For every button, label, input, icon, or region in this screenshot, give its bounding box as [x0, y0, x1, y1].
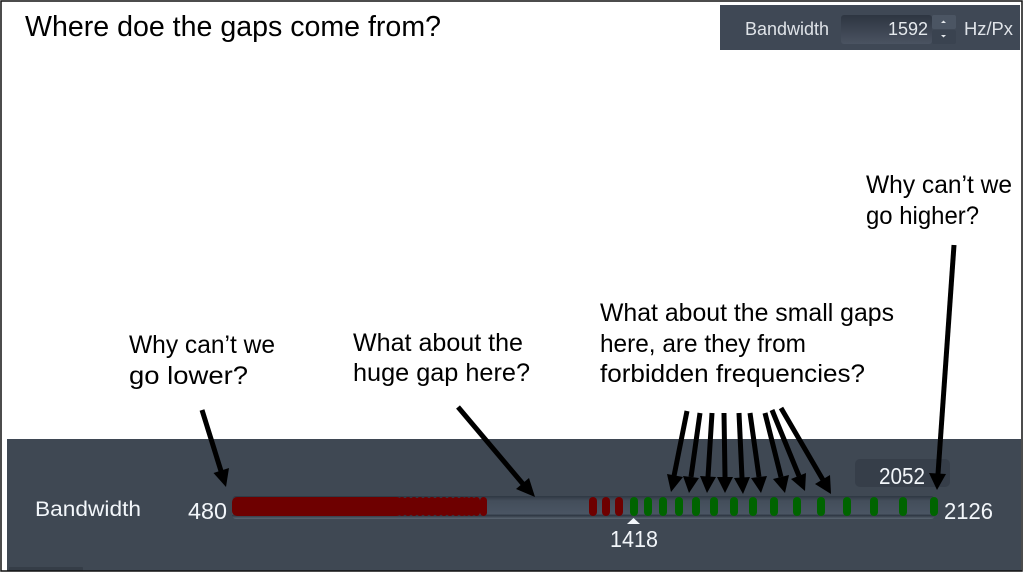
question: go higher: Why can’t we — [866, 171, 1012, 199]
question: go lower: go lower? — [129, 362, 248, 390]
spinner buttons — [932, 15, 956, 44]
question: huge gap: huge gap here? — [353, 359, 530, 387]
value field — [841, 15, 932, 44]
question: go lower — [129, 331, 275, 390]
top bandwidth control — [720, 5, 1020, 50]
question: huge gap — [353, 329, 530, 387]
maximum value: 2126 — [944, 498, 993, 524]
red ticks — [589, 497, 623, 516]
lower-left tab edge — [9, 567, 83, 571]
arrows — [202, 245, 954, 497]
question: small gaps: here, are they from — [600, 330, 806, 358]
question: go higher: go higher? — [866, 202, 979, 230]
red forbidden band — [232, 497, 487, 516]
question: huge gap: What about the — [353, 329, 523, 357]
bottom slider panel — [7, 439, 1021, 571]
question: small gaps — [600, 299, 894, 388]
question: small gaps: forbidden frequencies? — [600, 360, 865, 388]
value tooltip — [855, 459, 950, 489]
slider label: Bandwidth — [35, 497, 141, 521]
question: go lower: Why can’t we — [129, 331, 275, 359]
minimum value: 480 — [188, 498, 227, 524]
field value: 1592 — [888, 19, 928, 39]
arrow: to minimum — [202, 410, 229, 487]
unit label: Hz/Px — [964, 19, 1013, 39]
green ticks — [630, 497, 938, 516]
control label: Bandwidth — [745, 19, 829, 39]
question: small gaps: What about the small gaps — [600, 299, 894, 327]
arrows: small gaps — [667, 408, 831, 494]
arrow: to maximum — [929, 245, 954, 490]
slider track — [232, 496, 935, 519]
slider marker — [627, 518, 640, 524]
marker value: 1418 — [610, 526, 658, 552]
question: go higher — [866, 171, 1012, 230]
title: Where doe the gaps come from? — [25, 11, 441, 43]
value tooltip: 2052 — [879, 463, 925, 489]
arrow: to huge gap — [458, 407, 535, 497]
